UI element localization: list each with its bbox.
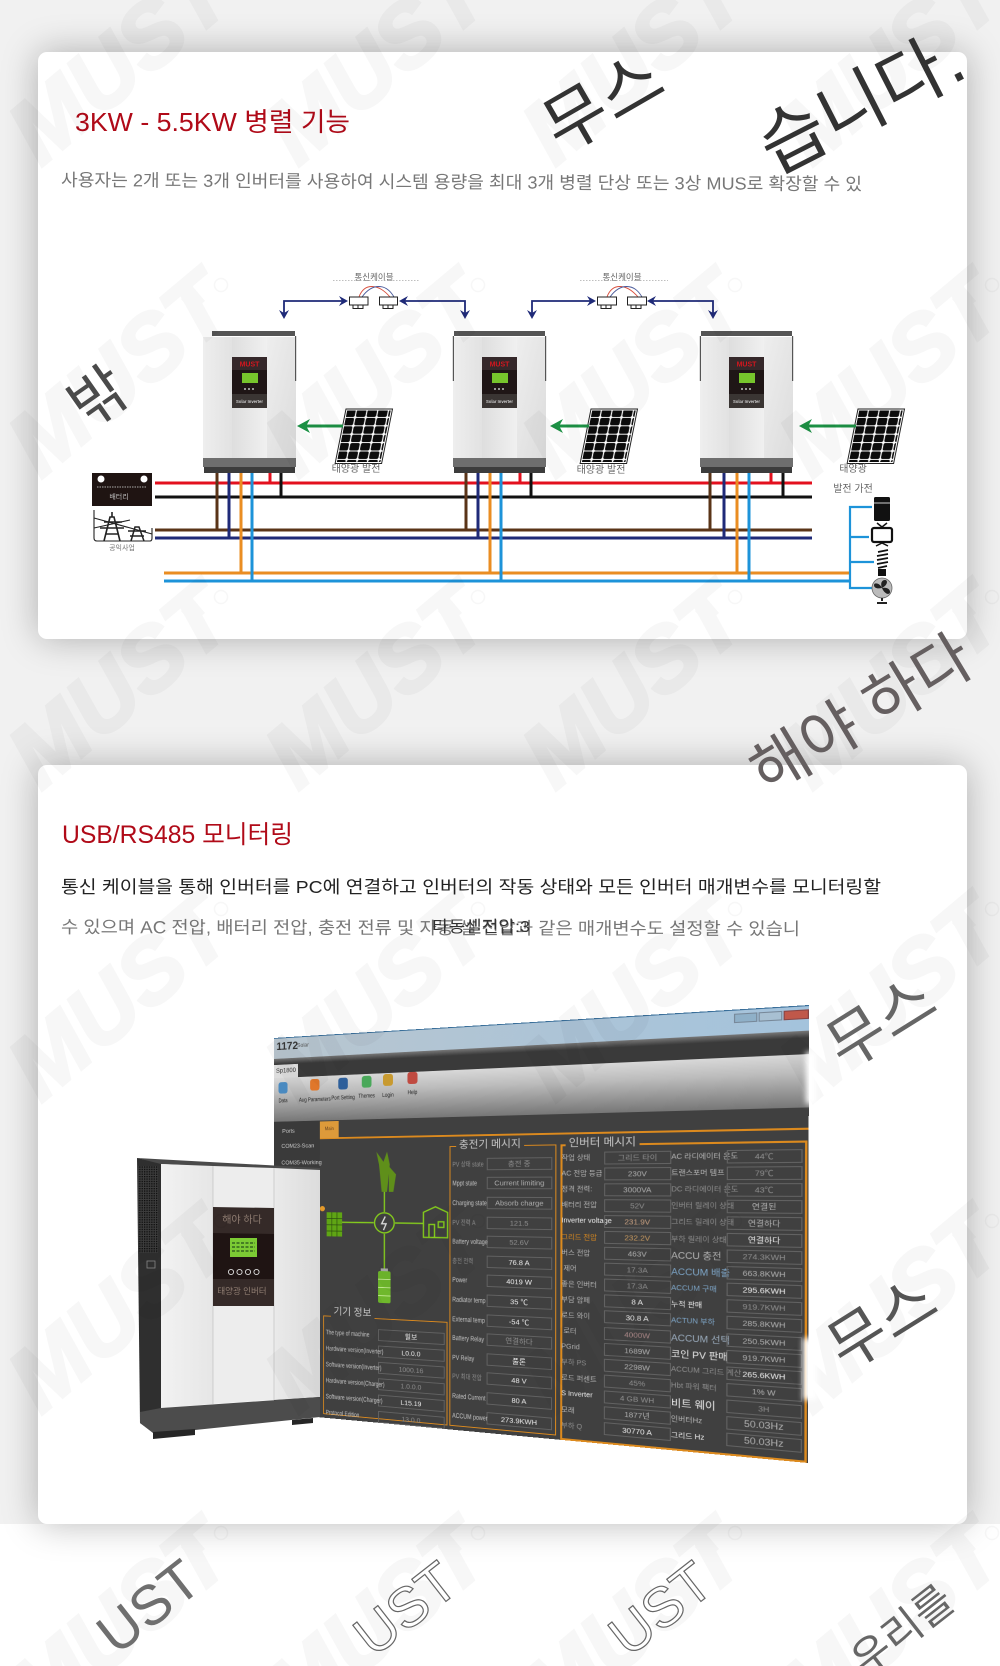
inverter table: 부담 암페 [561,1296,590,1305]
inverter table: 코인 PV 판매 [671,1348,728,1362]
icon: bulb [877,550,888,576]
charger table: Absorb charge [495,1199,544,1208]
device info table: 1.0.0.0 [400,1381,421,1391]
icon: fan [872,578,892,603]
icon: utility grid [94,510,152,552]
charger table: PV 최대 전압 [452,1372,482,1383]
device info table: The type of machine [326,1328,369,1338]
inverter table: 4 GB WH [620,1394,654,1405]
inverter table [561,1149,802,1453]
communication cable link 1: 통신케이블 [354,272,394,282]
inverter table: 30770 A [622,1426,652,1437]
inverter table: ACCUM 선택 [671,1332,730,1345]
inverter table: 232.2V [624,1233,650,1243]
inverter table: 누적 판매 [671,1301,702,1309]
inverter table: AC 전압 등급 [561,1171,602,1178]
charger table: 연결하다 [505,1336,533,1347]
title bar [274,1005,809,1059]
inverter table: 배터리 전압 [561,1202,597,1209]
solar panel 1 [335,409,392,464]
charger table: 52.6V [509,1238,529,1247]
watermark: MUST logo repeat: MUST [503,874,768,1119]
inverter table: ACCUM 구매 [671,1285,717,1293]
arrow: solar 1 to inverter 1 [297,419,343,433]
charger table: External temp [452,1314,485,1324]
inverter table: 50.03Hz [744,1419,784,1432]
charger table: Battery Relay [452,1333,484,1344]
inverter table: 그리드 릴레이 상태 [671,1219,734,1227]
watermark: MUST logo repeat: MUST [246,250,511,495]
text block: monitoring description line 1: 통신 케이블을 통해 인버터를 PC에 연결하고 인버터의 작동 상태와 모든 인버터 매개변수를 모니터링할 [61,877,881,897]
text block: monitoring description line 2: 타동셀전압:3 [432,918,530,936]
inverter 3: MUST [737,362,757,368]
heading: charger info: 충전기 메시지 [459,1138,521,1151]
inverter table: 부하 Q [561,1422,582,1431]
charger table: 76.8 A [509,1258,530,1267]
overlay text: UST outline 1: UST [342,1549,469,1666]
side navigation [274,1121,320,1417]
charger table: 충전 전력 [452,1256,473,1265]
inverter 1 [203,331,296,473]
panel: device info [323,1315,448,1426]
power flow diagram [320,1152,448,1304]
toolbar: Port Setting [331,1094,355,1102]
inverter table: 트랜스포머 템프 [671,1170,724,1177]
inverter table: 그리드 타이 [618,1152,657,1162]
charger table: 273.9KWH [501,1415,537,1427]
inverter table: AC 라디에이터 온도 [671,1153,738,1161]
side navigation: COM35-Working [281,1160,322,1166]
toolbar: Help [408,1089,417,1096]
inverter table: 463V [628,1249,647,1259]
device info table [326,1328,445,1429]
inverter table: 265.6KWH [742,1369,785,1381]
inverter table: 연결하다 [748,1219,780,1228]
inverter table: 231.9V [624,1217,650,1227]
device info table: Hardware version(Charger) [326,1376,384,1388]
solar labels: 태양광 발전 [577,464,625,476]
inverter table: 230V [628,1169,647,1178]
soft edge patches on screenshot [803,1052,817,1400]
overlay text: haeya hada: 해야 하다 [739,623,985,808]
inverter table: 919.7KWH [743,1302,786,1314]
inverter table: PGrid [561,1343,580,1351]
panel: USB/RS485 monitoring [38,765,967,1524]
inverter table: 제어 [563,1265,577,1272]
inverter table: 인버터Hz [671,1415,702,1425]
charger table: Charging state [452,1199,487,1207]
inverter table: 인버터 릴레이 상태 [671,1203,734,1211]
communication cable link 1 [279,272,470,319]
text block: parallel description: 사용자는 2개 또는 3개 인버터를 사용하여 시스템 용량을 최대 3개 병렬 단상 또는 3상 MUS로 확장할 수 있 [61,170,862,194]
charger table [452,1157,552,1430]
inverter table: 부하 릴레이 상태 [671,1236,727,1244]
charger table: PV 상태 state [452,1160,484,1168]
watermark: MUST logo repeat: MUST [246,1186,511,1431]
charger table: 풀론 [512,1357,526,1366]
inverter table: DC 라디에이터 온도 [671,1187,738,1194]
inverter table: ACCUM 배출 [671,1267,730,1279]
communication cable link 2 [527,272,718,319]
charger table: 35 ℃ [510,1297,528,1307]
charger table: Radiator temp [452,1295,486,1305]
inverter table: 919.7KWH [742,1353,785,1364]
device info table: 힐보 [405,1332,417,1341]
watermark: MUST logo repeat: MUST [503,562,768,807]
watermark: MUST logo repeat: MUST [503,1186,768,1431]
charger table: Power [452,1276,467,1285]
icon: battery [92,473,152,506]
charger table: 121.5 [510,1218,528,1227]
communication cable link 2: 통신케이블 [602,272,642,282]
charger table: 80 A [511,1396,526,1406]
inverter table: 모래 [561,1406,574,1414]
device info table: Protocol Edition [326,1408,359,1419]
arrow: solar 3 to inverter 3 [799,419,856,433]
inverter table: 부하 PS [561,1359,586,1368]
inverter table: 비트 웨이 [671,1398,716,1413]
heading: device info: 기기 정보 [333,1306,371,1319]
inverter table: 연결된 [752,1202,776,1211]
inverter table: 250.5KWH [743,1336,785,1347]
inverter table: 79℃ [755,1168,774,1178]
inverter table: 295.6KWH [743,1286,786,1297]
charger table: 충전 중 [508,1159,531,1168]
product: hybrid solar inverter: 태양광 인버터 [217,1286,267,1296]
panel: charger info [449,1144,556,1436]
inverter table: 로터 [563,1328,577,1336]
solar labels: 태양광 [839,463,867,475]
icon: fridge [874,497,890,521]
screenshot: monitoring software window [274,1005,809,1463]
icon: utility grid: 공익사업 [109,543,135,552]
inverter table: 3H [758,1404,769,1414]
device info table: Hardware version(Inverter) [326,1344,383,1355]
product: hybrid solar inverter [137,1158,320,1439]
overlay text: musu low: 무스 [816,1265,949,1384]
inverter table: 작업 상태 [562,1155,590,1162]
inverter table: 274.3KWH [743,1252,786,1262]
inverter table: 정격 전력: [561,1187,592,1193]
inverter table: 1689W [624,1346,650,1356]
device info table: Software version(Charger) [326,1392,383,1405]
inverter table: 1% W [752,1387,776,1398]
charger table: ACCUM power [452,1411,488,1422]
device info table: L0.0.0 [401,1348,420,1358]
toolbar: Login [382,1092,394,1099]
toolbar: Aug Parameters [299,1096,331,1104]
inverter 1: Solar Inverter [236,399,263,404]
inverter table: 연결하다 [748,1235,780,1245]
solar panel 2 [580,409,638,464]
title bar: Solar [297,1043,309,1049]
overlay text: seumnida: 습니다. [746,19,977,189]
icon: battery: 배터리 [109,492,129,501]
product: hybrid solar inverter: 해야 하다 [222,1213,262,1226]
device info table: L15.19 [400,1398,421,1408]
inverter 3: Solar Inverter [733,399,760,404]
charger table: PV Relay [452,1353,474,1363]
inverter table: S Inverter [561,1390,593,1399]
solar labels [332,463,873,495]
heading: parallel function: 3KW - 5.5KW 병렬 기능 [75,107,350,137]
solar labels: 발전 가전 [833,483,873,495]
toolbar: Themes [358,1093,375,1100]
inverter table: 3000VA [623,1185,652,1194]
charger table: Current limiting [494,1179,544,1188]
inverter table: 그리드 Hz [671,1432,704,1442]
watermark: MUST logo repeat: MUST [246,874,511,1119]
inverter table: 좋은 인버터 [561,1281,597,1289]
inverter table: ACCUM 그리드 계산 [671,1366,741,1378]
inverter 2 [453,331,546,473]
arrow: solar 2 to inverter 2 [550,419,589,433]
orange tab and line [320,1107,877,1139]
icon: tv [872,523,892,546]
inverter table: Hbt 파워 팩터 [671,1383,717,1393]
inverter table: 4000W [624,1330,650,1340]
inverter table: 8 A [631,1298,643,1307]
heading: inverter info: 인버터 메시지 [569,1136,636,1149]
inverter table: 로드 퍼센트 [561,1375,597,1384]
tab: Sp1800 [276,1067,296,1075]
heading: USB/RS485 monitoring: USB/RS485 모니터링 [62,821,293,849]
panel: parallel function [38,52,967,639]
charger table: PV 전력 A [452,1218,476,1227]
inverter table: 17.3A [627,1282,648,1291]
toolbar [274,1054,809,1122]
watermark: MUST logo repeat: MUST [503,250,768,495]
solar labels: 태양광 발전 [332,463,380,475]
inverter table: ACTUN 부하 [671,1317,715,1327]
inverter table: 버스 전압 [561,1249,590,1257]
inverter 2: Solar Inverter [486,399,513,404]
inverter table: 285.8KWH [743,1319,785,1330]
side navigation: Ports [282,1128,295,1135]
inverter table: 로드 와이 [561,1312,590,1320]
inverter table: 1877년 [624,1410,650,1421]
bus wires [155,470,850,581]
inverter table: 52V [630,1201,645,1210]
charger table: Battery voltage [452,1237,488,1246]
tab [274,1064,298,1078]
inverter 2: MUST [490,362,510,368]
device info table: 1000.16 [399,1365,423,1375]
inverter table: 2298W [624,1362,650,1372]
charger table: 4019 W [506,1278,532,1287]
title bar: 1172 [276,1039,298,1053]
overlay text: bak: 밖 [56,354,140,441]
overlay text: UST outline 2: UST [597,1549,724,1666]
device info table: 13.0.0 [401,1414,420,1424]
charger table: Mppt state [452,1179,477,1188]
toolbar: Data [279,1098,288,1104]
inverter table: Inverter voltage [561,1217,612,1225]
inverter table: 43℃ [755,1185,774,1194]
overlay text: musu mid: 무스 [815,964,948,1083]
inverter table: 44℃ [755,1151,774,1161]
inverter 3 [700,331,793,473]
charger table: 48 V [511,1376,527,1386]
inverter table: 30.8 A [626,1314,649,1324]
watermark: MUST logo repeat: MUST [246,562,511,807]
panel: inverter info [560,1140,807,1463]
overlay text: musu top: 무스 [530,39,677,167]
orange tab and line: Main [325,1126,334,1132]
overlay text: UST solid: UST [85,1547,212,1666]
load wiring [850,507,874,588]
device info table: Software version(Inverter) [326,1360,381,1372]
inverter 1: MUST [240,362,260,368]
text block: monitoring description line 2: 수 있으며 AC 전압, 배터리 전압, 충전 전류 및 자동 셀 전압과 같은 매개변수도 설정할 수 있습니 [61,917,800,939]
inverter table: 그리드 전압 [561,1234,597,1241]
side navigation: COM23-Scan [281,1143,314,1150]
menu band [274,1031,809,1078]
solar panel 3 [847,409,904,464]
inverter table: 663.8KWH [743,1269,786,1280]
inverter table: 50.03Hz [744,1435,784,1449]
charger table: -54 ℃ [509,1317,529,1327]
inverter table: ACCU 충전 [671,1250,721,1262]
inverter table: 45% [629,1378,645,1388]
charger table: Rated Current [452,1391,485,1402]
inverter table: 17.3A [627,1265,648,1275]
